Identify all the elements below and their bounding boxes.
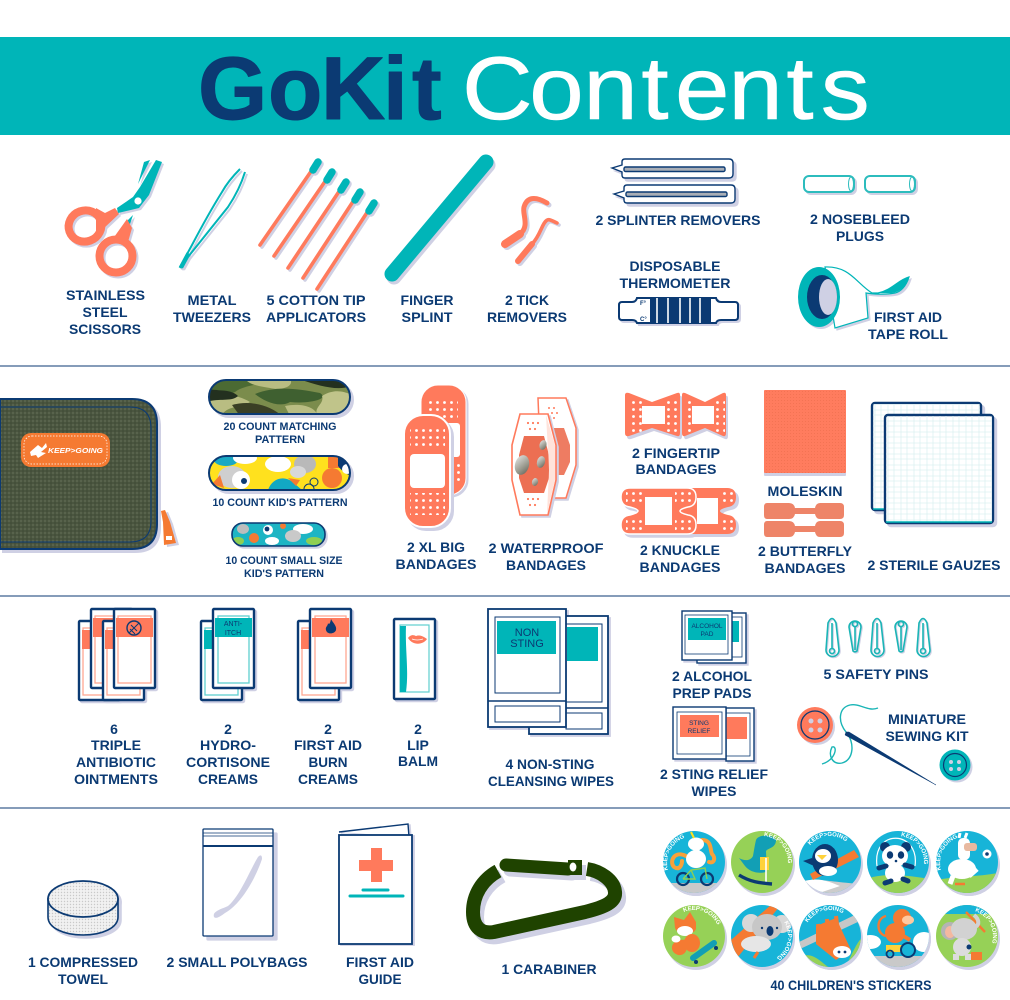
label: PREP PADS [672, 685, 752, 701]
item: thermometer [619, 258, 738, 323]
icon: thermometer [619, 298, 738, 323]
sticker: llama: KEEP>GOING [936, 834, 958, 870]
icon: hydrocortisone packs: ITCH [225, 630, 241, 637]
item: compressed towel [28, 881, 138, 987]
item: knuckle bandages [621, 488, 736, 575]
icon: moleskin sheet [764, 390, 846, 473]
label: CREAMS [298, 771, 358, 787]
label [346, 954, 414, 987]
icon: sewing kit [797, 705, 970, 785]
label: 2 TICK [505, 292, 549, 308]
sticker: penguin [799, 831, 863, 896]
needle [845, 732, 936, 785]
label: TAPE ROLL [868, 326, 948, 342]
sticker: unicorn: KEEP>GOING [663, 834, 684, 870]
label: 2 BUTTERFLY [758, 543, 853, 559]
item: kids pattern bandage [209, 452, 352, 509]
icon: alcohol pads: ALCOHOL [691, 623, 723, 630]
label: CORTISONE [186, 754, 270, 770]
item: scissors [64, 160, 162, 337]
label: TWEEZERS [173, 309, 251, 325]
sticker: penguin: KEEP>GOING [807, 832, 848, 845]
label: OINTMENTS [74, 771, 158, 787]
item: waterproof bandages [488, 398, 604, 573]
item: lip balm [394, 619, 438, 769]
icon: cleansing wipes: STING [510, 638, 544, 650]
icon: butterfly bandages [764, 503, 844, 537]
icon: scissors [64, 160, 162, 272]
label: 2 ALCOHOL [672, 668, 752, 684]
label: 40 CHILDREN'S STICKERS [770, 977, 932, 993]
label: REMOVERS [487, 309, 567, 325]
icon: nosebleed plugs [804, 176, 915, 192]
icon: XL bandages [404, 385, 466, 527]
label: CLEANSING WIPES [488, 773, 614, 789]
label [173, 292, 251, 325]
icon: lip balm pack [394, 619, 435, 699]
label: FIRST AID [874, 309, 942, 325]
item: splinter removers [596, 159, 760, 228]
item: sewing kit [797, 705, 970, 785]
item: safety pins [824, 618, 930, 682]
teal button [940, 750, 970, 780]
label: PATTERN [255, 434, 305, 446]
label [294, 721, 362, 787]
label: BANDAGES [640, 559, 720, 575]
label [487, 292, 567, 325]
zipper pull [161, 510, 176, 545]
label: BANDAGES [506, 557, 586, 573]
label: BANDAGES [764, 560, 846, 576]
label: 2 SMALL POLYBAGS [166, 954, 308, 970]
icon: sting relief wipes: STING [689, 720, 709, 727]
label: LIP [407, 737, 429, 753]
icon: tweezers [180, 169, 245, 268]
label: 2 STING RELIEF [660, 766, 768, 782]
label: 1 COMPRESSED [28, 954, 138, 970]
icon: carabiner [473, 860, 615, 932]
item: sterile gauzes [868, 403, 1000, 573]
item: cotton swabs [260, 162, 374, 325]
label [74, 721, 158, 787]
icon: ointment packs [79, 609, 155, 700]
icon: cleansing wipes [488, 609, 608, 734]
icon: compressed towel [48, 881, 118, 935]
item: sting relief wipes [660, 707, 768, 799]
item: tweezers [173, 169, 251, 325]
icon: burn cream packs [298, 609, 351, 700]
thread [822, 705, 878, 764]
label: GUIDE [358, 971, 402, 987]
panel: pouch and bandages [0, 378, 1000, 580]
label: 4 NON-STING [506, 756, 595, 772]
item: finger splint [392, 162, 486, 325]
label [640, 542, 720, 575]
item: tape roll [798, 267, 948, 342]
label: 2 [224, 721, 232, 737]
title: Contents: Contents [462, 38, 870, 138]
icon: polybag [203, 829, 273, 936]
label: 5 COTTON TIP [266, 292, 366, 308]
label: WIPES [692, 783, 736, 799]
sticker: koala [731, 905, 795, 970]
label [758, 543, 853, 576]
label [186, 721, 270, 787]
item: polybags [166, 829, 308, 970]
label: 2 WATERPROOF [488, 540, 604, 556]
label: SPLINT [402, 309, 453, 325]
label [488, 756, 614, 789]
sticker: fox: KEEP>GOING [682, 906, 720, 924]
label: BURN [308, 754, 348, 770]
label: KID'S PATTERN [244, 568, 324, 580]
pouch label [21, 433, 110, 467]
label: PLUGS [836, 228, 884, 244]
icon: pouch [0, 399, 176, 549]
item: first aid guide [339, 824, 414, 987]
sticker: unicorn [663, 831, 727, 896]
icon: alcohol pads: PAD [701, 631, 714, 638]
label: STEEL [82, 304, 128, 320]
item: alcohol prep pads [672, 611, 752, 701]
label [868, 309, 948, 342]
label: MOLESKIN [768, 483, 842, 499]
label [396, 539, 476, 572]
item: XL bandages [396, 385, 476, 572]
label: 2 FINGERTIP [632, 445, 720, 461]
item: small kids bandage [226, 523, 342, 580]
label [226, 555, 342, 580]
icon: tick removers [505, 198, 557, 261]
icon: stickers [663, 831, 1000, 970]
item: cleansing wipes [488, 609, 614, 789]
label: THERMOMETER [620, 275, 730, 291]
icon: cotton swabs [260, 162, 374, 289]
item: nosebleed plugs [804, 176, 915, 244]
label [620, 258, 730, 291]
panel: tools [64, 159, 948, 342]
label [660, 766, 768, 799]
label: HYDRO- [200, 737, 256, 753]
label: 2 NOSEBLEED [810, 211, 910, 227]
label: 2 KNUCKLE [640, 542, 720, 558]
icon: thermometer: F° [640, 301, 647, 307]
sticker: panda: KEEP>GOING [901, 832, 928, 864]
label [886, 711, 969, 744]
icon: alcohol pads [682, 611, 746, 663]
icon: hydrocortisone packs [201, 609, 254, 700]
item: fingertip bandages [625, 393, 726, 477]
label: 5 SAFETY PINS [824, 666, 928, 682]
label: FINGER [400, 292, 454, 308]
label [400, 292, 454, 325]
item: antibiotic ointments [74, 609, 158, 787]
label: ANTIBIOTIC [76, 754, 156, 770]
title banner [0, 37, 1010, 138]
label: FIRST AID [294, 737, 362, 753]
icon: splinter removers [612, 159, 735, 203]
label [28, 954, 138, 987]
sticker: sloth: KEEP>GOING [804, 906, 844, 922]
icon: thermometer: C° [640, 317, 647, 323]
item: butterfly bandages [758, 503, 853, 576]
label [672, 668, 752, 701]
label [810, 211, 910, 244]
icon: knuckle bandages [621, 488, 736, 534]
label: 20 COUNT MATCHING [224, 421, 336, 433]
sticker: elephant [936, 905, 1000, 970]
icon: sting relief wipes: RELIEF [688, 728, 710, 735]
label: 2 STERILE GAUZES [868, 557, 1000, 573]
label [632, 445, 720, 477]
sticker: koala: KEEP>GOING [777, 920, 792, 960]
label: DISPOSABLE [630, 258, 720, 274]
icon: fingertip bandages [625, 393, 726, 436]
icon: cleansing wipes: NON [515, 627, 539, 639]
icon: camo bandage strip [205, 378, 352, 416]
label [66, 287, 145, 337]
sticker: dinosaur [731, 831, 795, 896]
panel: extras and stickers [28, 823, 1000, 993]
icon: finger splint [392, 162, 486, 274]
item: hydrocortisone creams [186, 609, 270, 787]
label: 2 SPLINTER REMOVERS [596, 212, 760, 228]
label: 2 [414, 721, 422, 737]
label: METAL [188, 292, 237, 308]
sticker: elephant: KEEP>GOING [975, 908, 998, 944]
icon: kids pattern strip [209, 452, 352, 494]
sticker: sloth [799, 905, 863, 970]
label: APPLICATORS [266, 309, 366, 325]
coral button [797, 707, 833, 743]
label: CREAMS [198, 771, 258, 787]
sticker: panda [867, 831, 931, 896]
item: pouch [0, 399, 176, 549]
label: SEWING KIT [886, 728, 969, 744]
panel: ointments and wipes [74, 609, 970, 799]
label: 10 COUNT SMALL SIZE [226, 555, 342, 567]
sticker: monkey [867, 905, 931, 970]
label: TRIPLE [91, 737, 141, 753]
label: BANDAGES [396, 556, 476, 572]
label: STAINLESS [66, 287, 145, 303]
label [488, 540, 604, 573]
icon: sting relief wipes [673, 707, 754, 761]
icon: first aid guide [339, 824, 412, 944]
label: 2 XL BIG [407, 539, 465, 555]
item: moleskin [764, 390, 846, 499]
sticker: fox [663, 905, 727, 970]
label: MINIATURE [888, 711, 966, 727]
label: TOWEL [58, 971, 108, 987]
label: SCISSORS [69, 321, 141, 337]
sticker: dinosaur: KEEP>GOING [764, 832, 792, 863]
label: FIRST AID [346, 954, 414, 970]
label [266, 292, 366, 325]
label: BANDAGES [636, 461, 716, 477]
label: 6 [110, 721, 118, 737]
pouch label: KEEP>GOING [48, 446, 103, 455]
icon: waterproof bandages [512, 398, 576, 515]
item: carabiner [473, 860, 615, 977]
sticker: llama [936, 831, 1000, 896]
item: stickers [663, 831, 1000, 993]
label: 2 [324, 721, 332, 737]
item: tick removers [487, 198, 567, 325]
item: burn creams [294, 609, 362, 787]
icon: tape roll [798, 267, 909, 328]
label [224, 421, 336, 446]
label: 10 COUNT KID'S PATTERN [212, 497, 348, 509]
title: GoKit: GoKit [198, 38, 442, 138]
icon: sterile gauzes [872, 403, 993, 523]
icon: hydrocortisone packs: ANTI- [224, 621, 243, 628]
item: camo bandage [205, 378, 352, 446]
icon: safety pins [826, 618, 930, 656]
icon: small kids strip [232, 523, 325, 546]
label [398, 721, 438, 769]
label: BALM [398, 753, 438, 769]
label: 1 CARABINER [502, 961, 596, 977]
